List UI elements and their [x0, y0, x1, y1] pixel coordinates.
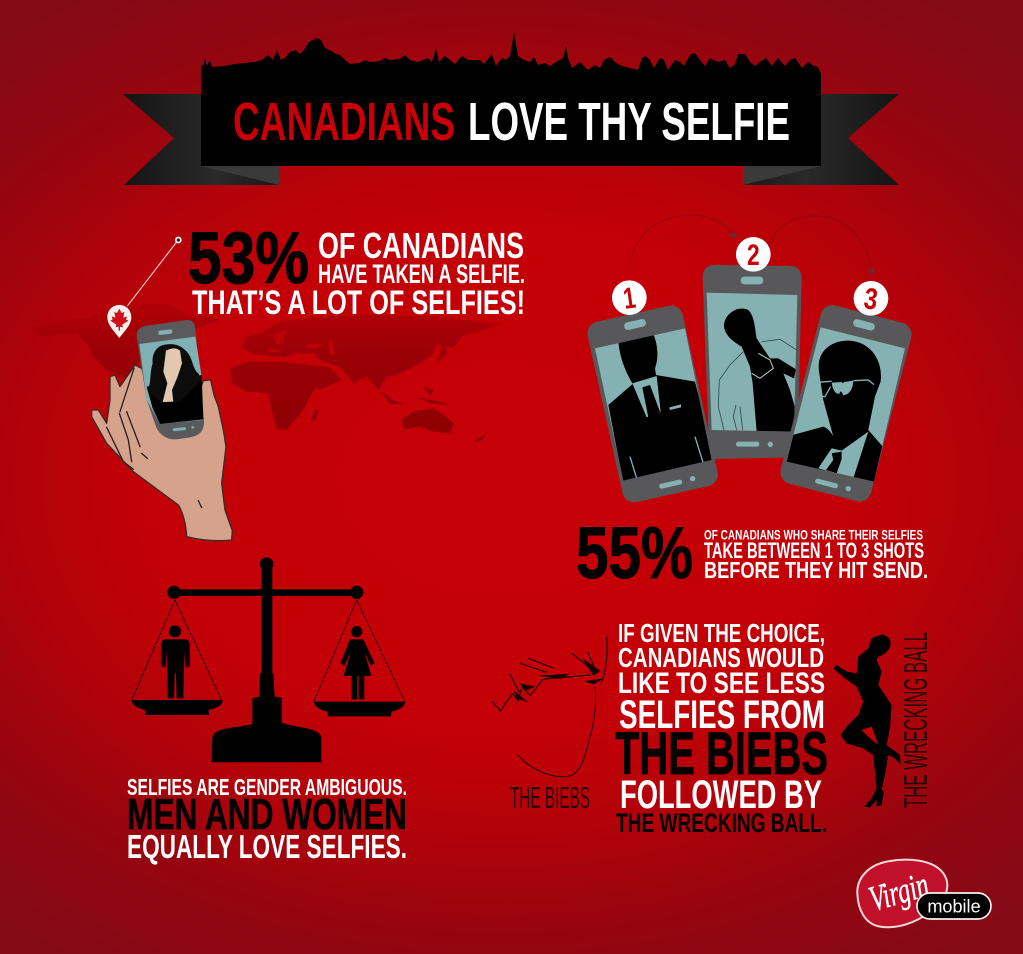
title banner [123, 32, 899, 185]
logo: Virgin Mobile: mobile [927, 896, 981, 917]
text: THE BIEBS [510, 780, 590, 815]
finger lines [107, 368, 202, 508]
phone 3 [778, 303, 914, 504]
logo: Virgin Mobile: Virgin [864, 864, 933, 919]
title text: CANADIANS [233, 92, 455, 152]
text: less selfies from [615, 618, 828, 838]
scale stand [167, 557, 363, 762]
text: less selfies from: CANADIANS WOULD [618, 642, 824, 673]
stat: 55% share: BEFORE THEY HIT SEND. [704, 557, 928, 583]
text: less selfies from: THE BIEBS [615, 720, 828, 787]
text: gender ambiguous [127, 774, 407, 866]
stat: 55% share: OF CANADIANS WHO SHARE THEIR SELFIES [704, 526, 923, 542]
text: less selfies from: THE WRECKING BALL. [616, 808, 827, 838]
world map [33, 303, 500, 442]
left ribbon [123, 94, 279, 185]
illustration: woman silhouette [833, 634, 901, 808]
illustration: three phones [585, 215, 914, 505]
badge 2: 2 [747, 239, 760, 272]
title text [233, 92, 790, 152]
hand [92, 365, 232, 541]
badge 1: 1 [621, 282, 638, 316]
stat: 55% share: 55% [576, 513, 693, 594]
phone [137, 320, 204, 439]
label: The Wrecking Ball: THE WRECKING BALL [897, 632, 934, 808]
phone 2 [703, 265, 802, 459]
text: less selfies from: FOLLOWED BY [620, 773, 822, 817]
connecting arcs [629, 215, 872, 277]
illustration: hand holding phone [92, 320, 232, 541]
badge 3: 3 [862, 282, 880, 317]
illustration: Canada map pin [107, 237, 182, 338]
right ribbon [743, 94, 899, 185]
stat: 53% of Canadians: THAT’S A LOT OF SELFIES! [192, 284, 525, 322]
stat: 55% share [576, 513, 928, 594]
badge 3 [854, 281, 888, 317]
text: less selfies from: LIKE TO SEE LESS [618, 667, 825, 700]
left pan with man [132, 600, 223, 715]
stat: 53% of Canadians: 53% [188, 218, 309, 299]
illustration: balance scale [132, 557, 405, 762]
text: less selfies from: SELFIES FROM [619, 693, 825, 737]
badge 2 [736, 237, 771, 272]
text: gender ambiguous: EQUALLY LOVE SELFIES. [127, 829, 407, 866]
phone 1 [585, 303, 720, 505]
title text: LOVE THY SELFIE [468, 92, 790, 152]
badge 1 [612, 280, 647, 316]
illustration: The Biebs hair sketch [492, 637, 607, 777]
stat: 53% of Canadians: HAVE TAKEN A SELFIE. [318, 259, 525, 289]
logo: Virgin Mobile [857, 860, 991, 927]
text: less selfies from: IF GIVEN THE CHOICE, [618, 618, 825, 648]
stat: 53% of Canadians: OF CANADIANS [318, 225, 524, 266]
skyline banner [201, 32, 821, 166]
right pan with woman [314, 600, 405, 716]
text: gender ambiguous: MEN AND WOMEN [127, 790, 407, 839]
stat: 53% of Canadians [188, 218, 525, 322]
text: gender ambiguous: SELFIES ARE GENDER AMBIGUOUS. [127, 774, 407, 800]
